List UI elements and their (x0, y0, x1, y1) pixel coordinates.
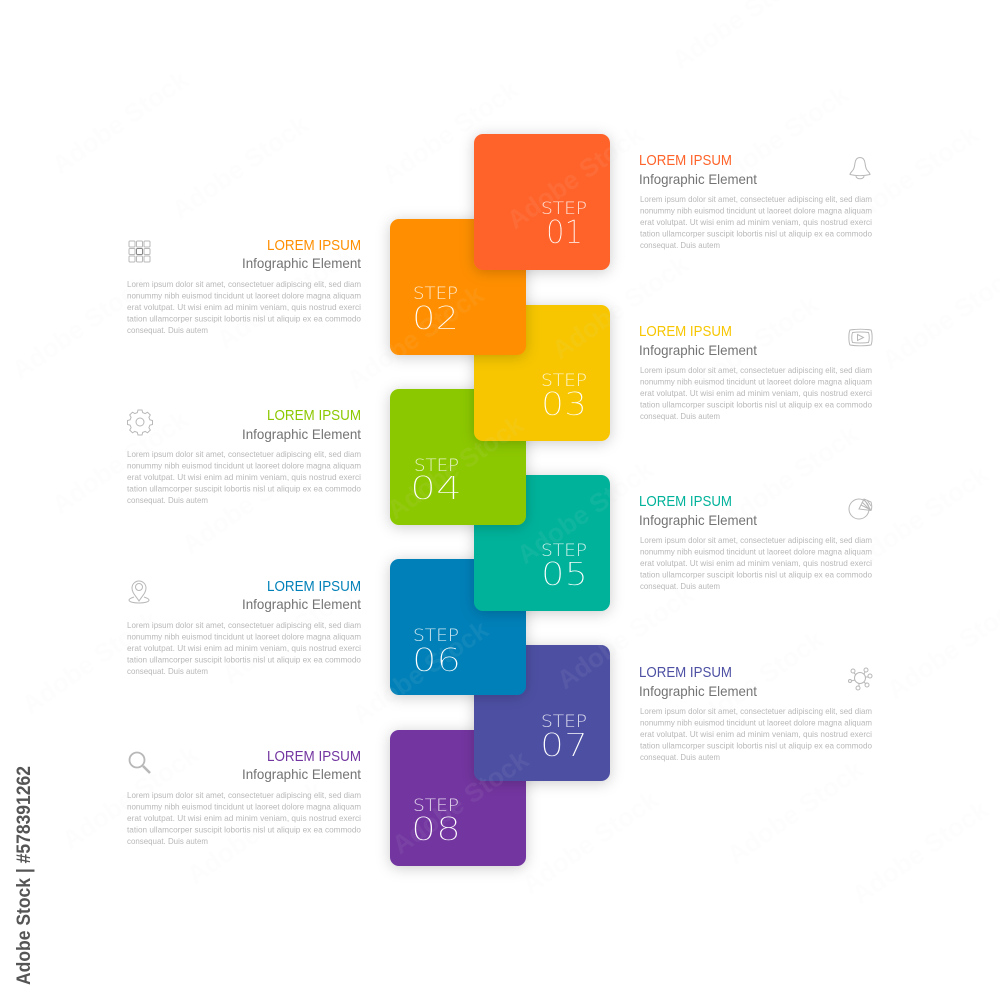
panel: step 08 card (390, 730, 526, 866)
panel: step 05 card: STEP (541, 541, 587, 560)
text block: step 04: Infographic Element (242, 426, 361, 442)
watermark: Adobe Stock (546, 249, 694, 365)
icon: bell (850, 158, 870, 179)
text block: step 05: tation ullamcorper suscipit lobortis nisl ut aliquip ex ea commodo (640, 570, 872, 580)
watermark: Adobe Stock (166, 109, 314, 225)
panel: step 07 card: 07 (540, 726, 588, 764)
text block: step 08: Lorem ipsum dolor sit amet, consectetuer adipiscing elit, sed diam (127, 790, 361, 800)
panel: step 05 card: 05 (541, 555, 588, 593)
watermark: Adobe Stock (721, 754, 869, 870)
panel: step 02 card: STEP (413, 284, 458, 303)
text block: step 07: consequat. Duis autem (640, 752, 720, 762)
text block: step 01: LOREM IPSUM (639, 153, 732, 169)
text block: step 03: erat volutpat. Ut wisi enim ad minim veniam, quis nostrud exerci (640, 388, 872, 398)
icon: video player (849, 329, 872, 346)
watermark: Adobe Stock (181, 774, 329, 890)
icon: map pin (129, 581, 149, 603)
text block: step 02: consequat. Duis autem (127, 325, 208, 335)
text block: step 02: LOREM IPSUM (267, 238, 361, 254)
watermark: Adobe Stock (681, 624, 829, 740)
watermark: Adobe Stock (376, 74, 524, 190)
icon: magnifier (130, 752, 150, 773)
text block: step 06: consequat. Duis autem (127, 666, 208, 676)
watermark: Adobe Stock (846, 459, 994, 575)
text block: step 07: tation ullamcorper suscipit lobortis nisl ut aliquip ex ea commodo (640, 740, 872, 750)
text block: step 03: Infographic Element (639, 342, 757, 358)
text block: step 06: nonummy nibh euismod tincidunt ut laoreet dolore magna aliquam (127, 632, 361, 642)
watermark: Adobe Stock (6, 269, 154, 385)
text block: step 07: Lorem ipsum dolor sit amet, consectetuer adipiscing elit, sed diam (640, 706, 872, 716)
watermark: Adobe Stock (716, 419, 864, 535)
text block: step 03 (639, 324, 872, 421)
text block: step 08: nonummy nibh euismod tincidunt ut laoreet dolore magna aliquam (127, 802, 361, 812)
watermark: Adobe Stock (16, 604, 164, 720)
text block: step 07: erat volutpat. Ut wisi enim ad minim veniam, quis nostrud exerci (640, 729, 872, 739)
panel: step 04 card: STEP (414, 456, 459, 475)
text block: step 08: tation ullamcorper suscipit lobortis nisl ut aliquip ex ea commodo (127, 824, 361, 834)
text block: step 05: nonummy nibh euismod tincidunt ut laoreet dolore magna aliquam (640, 546, 872, 556)
text block: step 03: LOREM IPSUM (639, 324, 732, 340)
text block: step 01: erat volutpat. Ut wisi enim ad minim veniam, quis nostrud exerci (640, 217, 872, 227)
text block: step 06: Lorem ipsum dolor sit amet, consectetuer adipiscing elit, sed diam (127, 620, 361, 630)
icon: pie chart (849, 499, 872, 519)
text block: step 02: nonummy nibh euismod tincidunt ut laoreet dolore magna aliquam (127, 290, 361, 300)
watermark: Adobe Stock (381, 409, 529, 525)
text block: step 04: nonummy nibh euismod tincidunt ut laoreet dolore magna aliquam (127, 460, 361, 470)
text block: step 07 (639, 665, 872, 762)
text block: step 01: nonummy nibh euismod tincidunt ut laoreet dolore magna aliquam (640, 206, 872, 216)
text block: step 06: Infographic Element (242, 596, 361, 612)
text block: step 08: LOREM IPSUM (267, 749, 361, 765)
text block: step 07: LOREM IPSUM (639, 665, 732, 681)
text block: step 02: erat volutpat. Ut wisi enim ad minim veniam, quis nostrud exerci (127, 302, 361, 312)
text block: step 01: Infographic Element (639, 171, 757, 187)
watermark: Adobe Stock (211, 239, 359, 355)
text block: step 04: Lorem ipsum dolor sit amet, consectetuer adipiscing elit, sed diam (127, 449, 361, 459)
text block: step 08: consequat. Duis autem (127, 836, 208, 846)
panel: step 04 card: 04 (410, 469, 462, 507)
watermark: Adobe Stock (706, 79, 854, 195)
panel: step 06 card: STEP (413, 626, 459, 645)
text block: step 06 (127, 579, 361, 676)
panel: step 06 card: 06 (412, 641, 461, 679)
text block: step 02: Lorem ipsum dolor sit amet, consectetuer adipiscing elit, sed diam (127, 279, 361, 289)
panel: step 08 card: 08 (411, 810, 461, 848)
watermark: Adobe Stock (216, 574, 364, 690)
watermark: Adobe Stock (46, 404, 194, 520)
text block: step 01: Lorem ipsum dolor sit amet, consectetuer adipiscing elit, sed diam (640, 194, 872, 204)
text block: step 05: consequat. Duis autem (640, 581, 720, 591)
text block: step 05: Infographic Element (639, 512, 757, 528)
panel: step 01 card (474, 134, 610, 270)
panel: step 04 card (390, 389, 526, 525)
text block: step 02 (127, 238, 361, 335)
text block: step 02: Infographic Element (242, 255, 361, 271)
text block: step 05: erat volutpat. Ut wisi enim ad minim veniam, quis nostrud exerci (640, 558, 872, 568)
text block: step 04: erat volutpat. Ut wisi enim ad minim veniam, quis nostrud exerci (127, 472, 361, 482)
text block: step 08: erat volutpat. Ut wisi enim ad minim veniam, quis nostrud exerci (127, 813, 361, 823)
text block: step 06: tation ullamcorper suscipit lobortis nisl ut aliquip ex ea commodo (127, 654, 361, 664)
panel: step 03 card: 03 (541, 385, 587, 423)
text block: step 03: nonummy nibh euismod tincidunt ut laoreet dolore magna aliquam (640, 376, 872, 386)
text block: step 08 (127, 749, 361, 846)
icon: gear (127, 410, 153, 435)
panel: step 06 card (390, 559, 526, 695)
icon: grid (129, 241, 150, 262)
text block: step 05 (639, 494, 872, 591)
text block: step 04: consequat. Duis autem (127, 495, 208, 505)
watermark: Adobe Stock (516, 784, 664, 900)
text block: step 01 (639, 153, 872, 250)
watermark: Adobe Stock (846, 794, 994, 910)
watermark: Adobe Stock (386, 744, 534, 860)
text block: step 04 (127, 408, 361, 505)
icon: network (848, 668, 872, 690)
watermark: Adobe Stock (341, 279, 489, 395)
text block: step 05: LOREM IPSUM (639, 494, 732, 510)
panel: step 02 card: 02 (412, 299, 459, 337)
text block: step 07: Infographic Element (639, 683, 757, 699)
text block: step 07: nonummy nibh euismod tincidunt ut laoreet dolore magna aliquam (640, 718, 872, 728)
text block: step 04: tation ullamcorper suscipit lobortis nisl ut aliquip ex ea commodo (127, 484, 361, 494)
panel: step 01 card: 01 (546, 213, 583, 251)
watermark: Adobe Stock (56, 739, 204, 855)
panel: step 07 card: STEP (541, 712, 587, 731)
text block: step 05: Lorem ipsum dolor sit amet, consectetuer adipiscing elit, sed diam (640, 535, 872, 545)
watermark: Adobe Stock (501, 119, 649, 235)
panel: step 03 card (474, 305, 610, 441)
text block: step 08: Infographic Element (242, 766, 361, 782)
watermark: Adobe Stock (511, 454, 659, 570)
text block: step 02: tation ullamcorper suscipit lobortis nisl ut aliquip ex ea commodo (127, 314, 361, 324)
watermark: Adobe Stock (551, 579, 699, 695)
panel: step 07 card (474, 645, 610, 781)
panel: step 05 card (474, 475, 610, 611)
text block: step 01: consequat. Duis autem (640, 240, 720, 250)
watermark: Adobe Stock (346, 614, 494, 730)
watermark: Adobe Stock (676, 289, 824, 405)
text block: step 01: tation ullamcorper suscipit lobortis nisl ut aliquip ex ea commodo (640, 228, 872, 238)
panel: step 02 card (390, 219, 526, 355)
text block: step 03: consequat. Duis autem (640, 411, 720, 421)
panel: step 01 card: STEP (541, 199, 587, 218)
panel: step 03 card: STEP (541, 371, 587, 390)
text block: step 06: LOREM IPSUM (267, 579, 361, 595)
text block: step 03: tation ullamcorper suscipit lobortis nisl ut aliquip ex ea commodo (640, 400, 872, 410)
text block: step 06: erat volutpat. Ut wisi enim ad minim veniam, quis nostrud exerci (127, 643, 361, 653)
watermark: Adobe Stock (46, 64, 194, 180)
text block: step 03: Lorem ipsum dolor sit amet, consectetuer adipiscing elit, sed diam (640, 365, 872, 375)
text block: step 04: LOREM IPSUM (267, 408, 361, 424)
watermark: Adobe Stock (836, 119, 984, 235)
watermark: Adobe Stock (176, 444, 324, 560)
stock credit: Adobe Stock | #578391262 (14, 766, 35, 985)
panel: step 08 card: STEP (413, 796, 459, 815)
